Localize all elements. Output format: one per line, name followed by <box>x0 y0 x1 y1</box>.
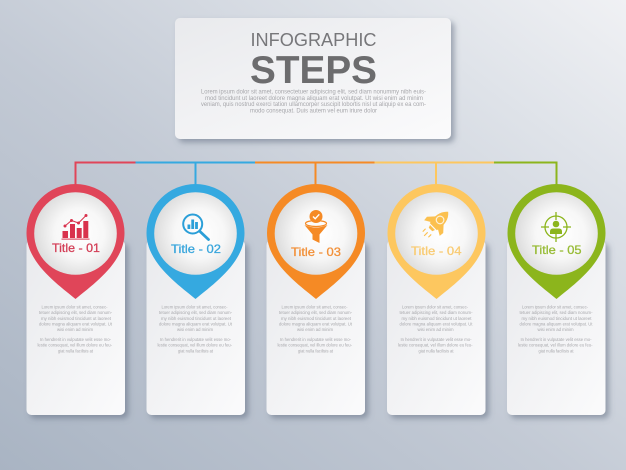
card 2 text: tetuer adipiscing elit, sed diam nonum- <box>159 310 233 315</box>
connector lines <box>76 162 556 185</box>
pin 5 <box>508 184 606 299</box>
card 5 text: giat nulla facilisis at <box>538 348 574 353</box>
title 01: Title - 01 <box>52 241 100 255</box>
card 4 text: giat nulla facilisis at <box>418 348 454 353</box>
card 5 text: dolore magna aliquam erat volutpat. Ut <box>520 321 593 326</box>
card 3 text: Lorem ipsum dolor sit amet, consec- <box>282 304 348 310</box>
pin 3 <box>267 184 365 299</box>
card 3 text: lestie consequat, vel illum dolore eu feu- <box>278 343 353 348</box>
card 3 text: dolore magna aliquam erat volutpat. Ut <box>279 321 353 326</box>
card 2 text: In hendrerit in vulputate velit esse mo- <box>160 337 232 342</box>
card 2 text: wisi enim ad minim <box>177 327 213 332</box>
card 3 text <box>278 304 353 353</box>
card 1 text: giat nulla facilisis at <box>58 348 94 353</box>
card 4 text: my nibh euismod tincidunt ut laoreet <box>402 316 472 321</box>
pin 1 inner circle <box>34 192 117 275</box>
header paragraph: Lorem ipsum dolor sit amet, consectetuer adipiscing elit, sed diam nonummy nibh euis- <box>201 89 426 95</box>
card 1 text: In hendrerit in vulputate velit esse mo- <box>40 337 112 342</box>
card 1 text: dolore magna aliquam erat volutpat. Ut <box>39 321 113 326</box>
card 4 text: tetuer adipiscing elit, sed diam nonum- <box>400 310 473 315</box>
card 4 text: dolore magna aliquam erat volutpat. Ut <box>400 321 473 326</box>
pin 4 inner circle <box>395 192 478 275</box>
card 3 text: my nibh euismod tincidunt ut laoreet <box>281 316 352 321</box>
panel: header <box>175 18 451 139</box>
card 2 text: Lorem ipsum dolor sit amet, consec- <box>162 304 228 310</box>
step 2 <box>146 184 245 415</box>
card 1 text: Lorem ipsum dolor sit amet, consec- <box>42 304 108 310</box>
card 5 text: my nibh euismod tincidunt ut laoreet <box>522 316 592 321</box>
icon: target person <box>541 212 571 242</box>
card 3 text: tetuer adipiscing elit, sed diam nonum- <box>279 310 353 315</box>
pin 1 <box>26 184 124 299</box>
card 5 <box>507 240 606 415</box>
card 1 text <box>38 304 113 353</box>
card 1 text: my nibh euismod tincidunt ut laoreet <box>41 316 112 321</box>
pin 2 <box>146 184 244 299</box>
title: infographic: INFOGRAPHIC <box>250 30 376 50</box>
step 1 <box>26 184 125 415</box>
card 3 <box>266 240 365 415</box>
pin 2 inner circle <box>154 192 237 275</box>
card 2 text: dolore magna aliquam erat volutpat. Ut <box>159 321 233 326</box>
icon: bar chart <box>62 214 90 240</box>
card 5 text: In hendrerit in vulputate velit esse mo- <box>520 337 592 342</box>
card 4 text: Lorem ipsum dolor sit amet, consec- <box>402 304 469 310</box>
card 3 text: wisi enim ad minim <box>297 327 333 332</box>
card 5 text <box>518 304 593 353</box>
header paragraph <box>201 89 426 114</box>
pin 4 <box>388 184 486 299</box>
header paragraph: mod tincidunt ut laoreet dolore magna aliquam erat volutpat. Ut wisi enim ad minim <box>205 96 423 102</box>
title 05: Title - 05 <box>532 243 582 257</box>
card 5 text: wisi enim ad minim <box>538 327 574 332</box>
card 1 text: tetuer adipiscing elit, sed diam nonum- <box>39 310 113 315</box>
card 2 text <box>158 304 233 353</box>
card 1 text: lestie consequat, vel illum dolore eu feu- <box>38 343 113 348</box>
icon: rocket <box>416 204 456 244</box>
card 2 text: my nibh euismod tincidunt ut laoreet <box>161 316 232 321</box>
card 4 text: wisi enim ad minim <box>418 327 454 332</box>
icon: magnifier <box>183 214 208 240</box>
card 2 text: lestie consequat, vel illum dolore eu feu- <box>158 343 233 348</box>
step 4 <box>387 184 486 415</box>
title 02: Title - 02 <box>171 242 221 256</box>
card 1 text: wisi enim ad minim <box>57 327 93 332</box>
card 5 text: lestie consequat, vel illum dolore eu feu- <box>518 343 593 348</box>
card 2 <box>146 240 245 415</box>
icon: funnel <box>304 210 328 243</box>
title: steps: STEPS <box>250 49 377 92</box>
header paragraph: veniam, quis nostrud exerci tation ullamcorper suscipit lobortis nisl ut aliquip ex ea com- <box>201 102 426 108</box>
card 3 text: In hendrerit in vulputate velit esse mo- <box>280 337 352 342</box>
card 5 text: Lorem ipsum dolor sit amet, consec- <box>522 304 589 310</box>
header paragraph: modo consequat. Duis autem vel eum iriure dolor <box>250 108 377 114</box>
title 03: Title - 03 <box>291 245 341 259</box>
card 5 text: tetuer adipiscing elit, sed diam nonum- <box>520 310 593 315</box>
step 3 <box>266 184 365 415</box>
card 4 text: In hendrerit in vulputate velit esse mo- <box>400 337 472 342</box>
card 4 text: lestie consequat, vel illum dolore eu feu- <box>398 343 473 348</box>
pin 5 inner circle <box>515 192 598 275</box>
step 5 <box>507 184 606 415</box>
card 2 text: giat nulla facilisis at <box>178 348 214 353</box>
pin 3 inner circle <box>275 192 357 275</box>
card 3 text: giat nulla facilisis at <box>298 348 334 353</box>
card 4 <box>387 240 486 415</box>
title 04: Title - 04 <box>411 244 462 258</box>
card 4 text <box>398 304 473 353</box>
card 1 <box>26 240 125 415</box>
